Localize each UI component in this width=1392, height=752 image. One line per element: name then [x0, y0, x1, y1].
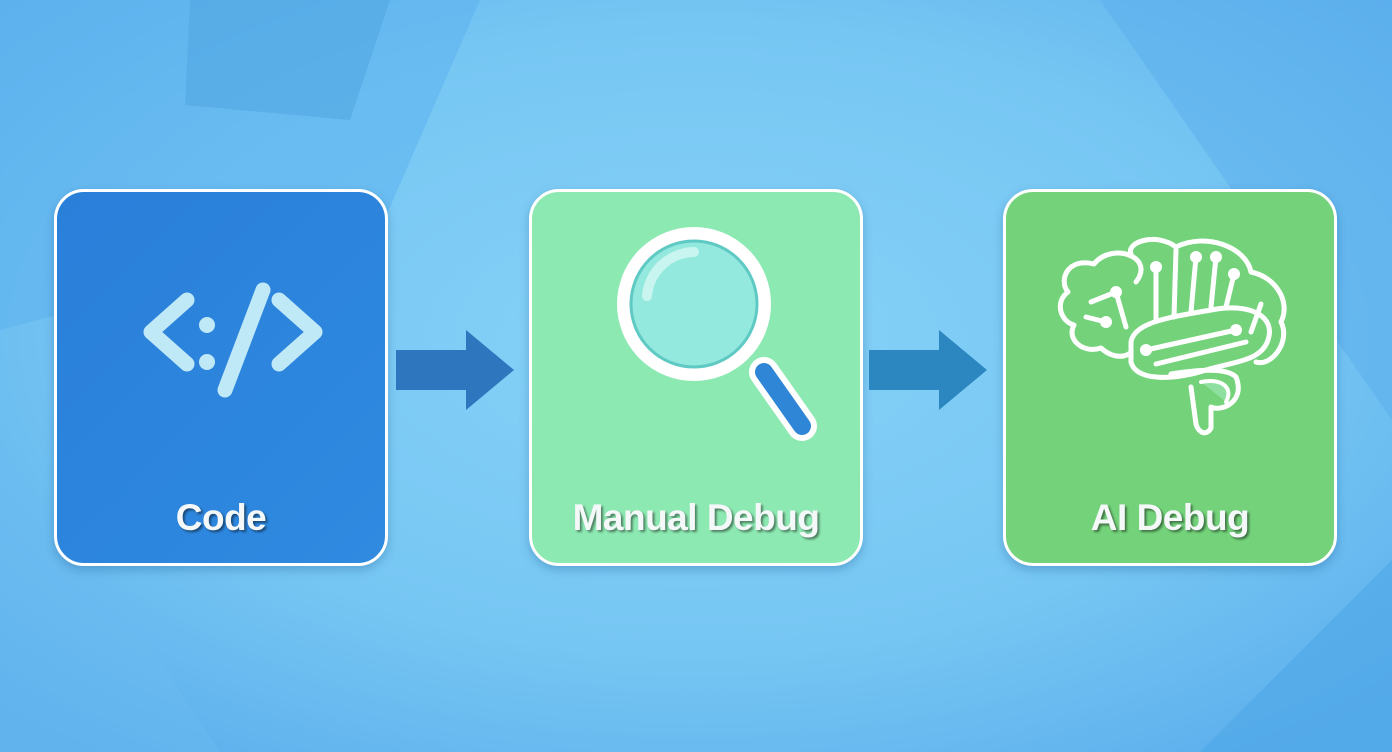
panel: manual debug — [529, 189, 863, 566]
panel: AI debug — [1003, 189, 1337, 566]
icon: brain — [1058, 236, 1287, 436]
icon: magnifier — [617, 227, 817, 441]
panel: code — [54, 189, 388, 566]
arrow 1 — [396, 330, 514, 410]
label: Code: Code — [176, 497, 266, 538]
label: Manual Debug: Manual Debug — [573, 497, 819, 538]
icon: code brackets — [144, 282, 322, 398]
label: AI Debug: AI Debug — [1091, 497, 1249, 538]
arrow 2 — [869, 330, 987, 410]
